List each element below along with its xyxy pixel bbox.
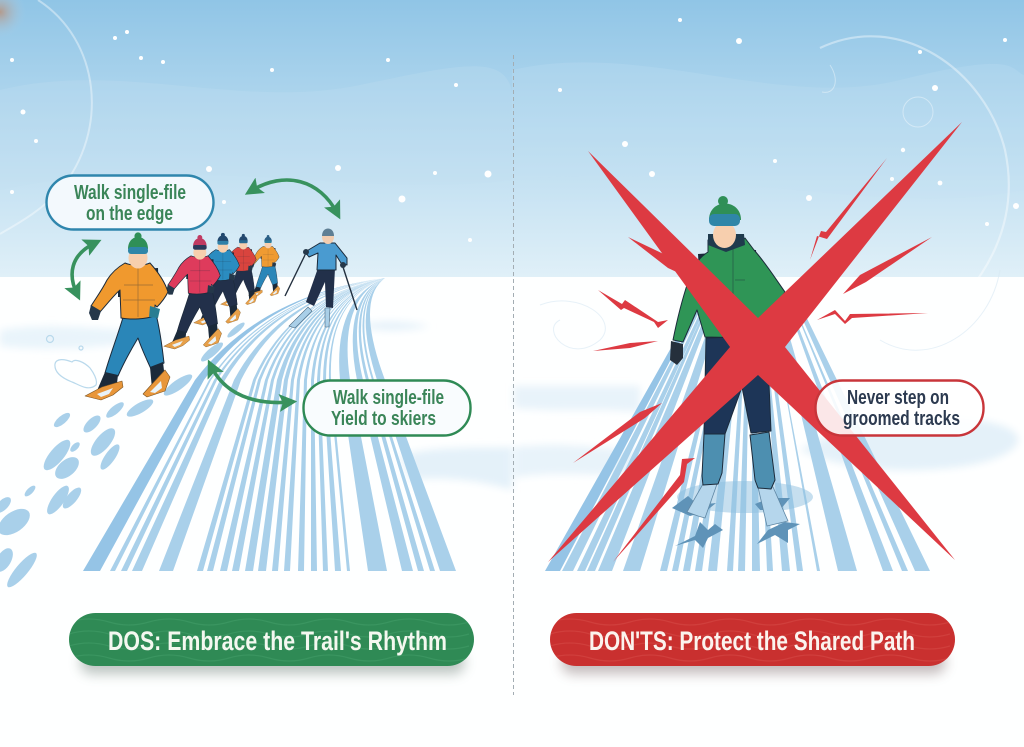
callout: walk single-file on the edge	[46, 176, 214, 230]
callout: never step on groomed tracks: Never step on	[847, 387, 949, 409]
groomed ski tracks: right	[545, 300, 930, 571]
figure: skier	[285, 228, 357, 328]
red lightning sparks	[573, 158, 932, 562]
banner: dos	[69, 613, 474, 674]
banner: don'ts: DON'TS: Protect the Shared Path	[589, 626, 915, 656]
callout: walk single-file on the edge: Walk single-file	[74, 182, 186, 204]
groomed ski tracks: left	[83, 278, 456, 571]
arrow: trail yield	[211, 366, 290, 403]
callout: yield to skiers: Walk single-file	[333, 387, 444, 409]
figure: snowshoer three (blue)	[194, 233, 240, 325]
snowflakes	[10, 18, 1019, 242]
callout: yield to skiers: Yield to skiers	[331, 408, 436, 430]
callout: never step on groomed tracks: groomed tracks	[843, 408, 960, 430]
callout: yield to skiers	[304, 380, 470, 436]
arrow: to edge	[72, 243, 95, 294]
big red X	[548, 122, 962, 562]
figure: snowshoer five (orange)	[248, 235, 280, 297]
figure: person on groomed tracks	[670, 196, 813, 548]
divider	[512, 55, 514, 695]
figure: snowshoer four (red)	[221, 234, 257, 306]
snow puff near lead walker	[46, 336, 96, 388]
banner: don'ts	[550, 613, 955, 674]
figure: snowshoer two (pink)	[164, 235, 222, 349]
arrow: skier gap	[251, 180, 337, 213]
figure: lead snowshoer (orange jacket)	[85, 232, 170, 400]
snowshoe footprints	[0, 321, 246, 591]
banner: dos: DOS: Embrace the Trail's Rhythm	[108, 626, 447, 656]
decorative swirls	[0, 0, 1009, 350]
callout: never step on groomed tracks	[816, 380, 984, 436]
callout: walk single-file on the edge: on the edge	[86, 203, 173, 225]
